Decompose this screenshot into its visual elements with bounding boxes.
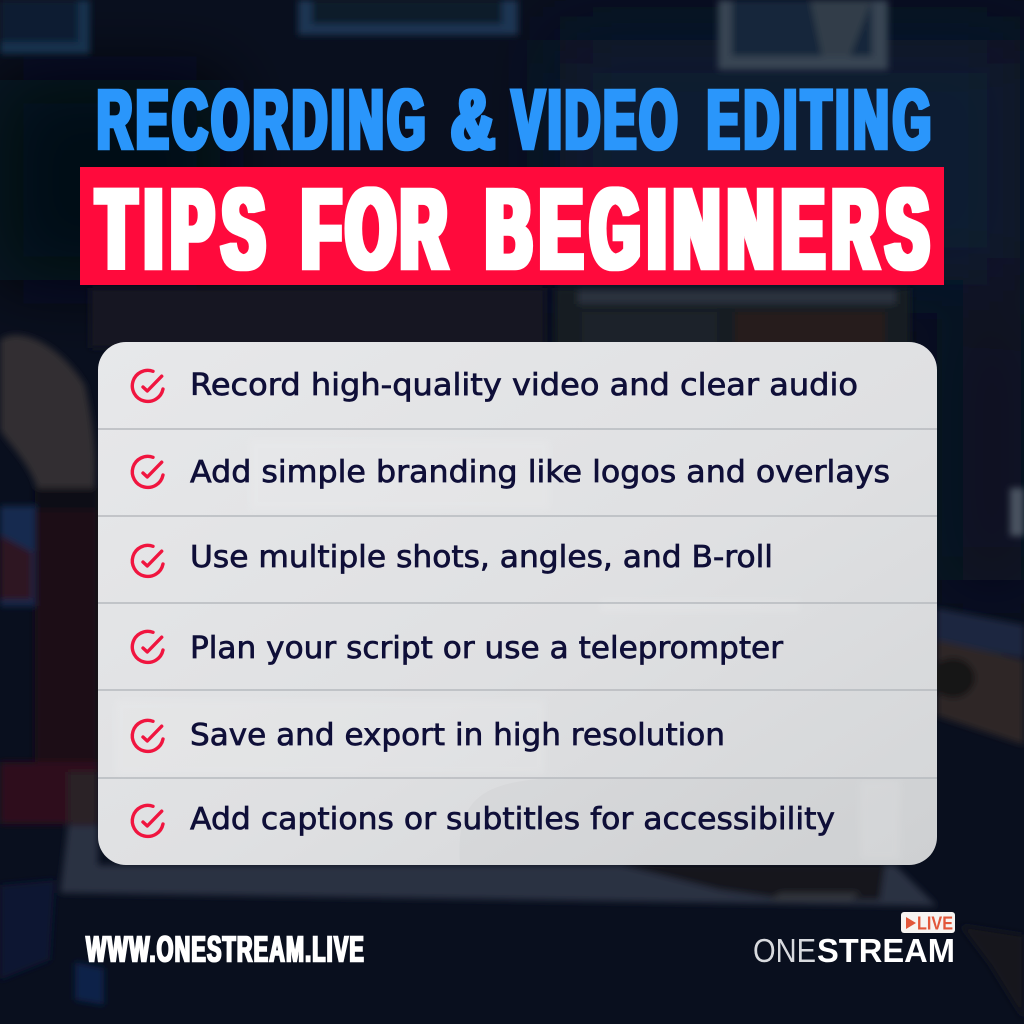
heading line 1: EDITING [707, 73, 931, 167]
hand and wrist [0, 335, 95, 492]
wordmark [753, 933, 955, 970]
tip 1: Record high-quality video and clear audio [190, 368, 858, 403]
logo: OneStream Live [753, 912, 955, 970]
monitors [90, 288, 545, 348]
right side objects [1010, 488, 1024, 536]
panel: tips list [98, 342, 937, 865]
heading line 1: VIDEO [512, 73, 677, 167]
live badge [901, 912, 955, 934]
tip 5: Save and export in high resolution [190, 718, 725, 753]
heading banner: FOR [302, 167, 446, 293]
wordmark: STREAM [817, 933, 955, 970]
tip 6: Add captions or subtitles for accessibility [190, 802, 835, 837]
heading line 1: RECORDING [97, 73, 425, 167]
heading banner: BEGINNERS [486, 167, 928, 293]
wall frames [0, 0, 90, 54]
website url: WWW.ONESTREAM.LIVE [86, 930, 364, 970]
blue object and sleeve [0, 506, 36, 606]
live badge: LIVE [917, 914, 953, 934]
tip 3: Use multiple shots, angles, and B-roll [190, 540, 773, 575]
heading line 1: & [451, 73, 495, 167]
heading line 1 [97, 73, 931, 167]
tip 4: Plan your script or use a teleprompter [190, 631, 784, 666]
heading banner [80, 167, 944, 293]
tip 2: Add simple branding like logos and overlays [190, 455, 890, 490]
wordmark: ONE [753, 933, 816, 970]
desk surface [60, 825, 937, 906]
heading banner: TIPS [97, 167, 264, 293]
